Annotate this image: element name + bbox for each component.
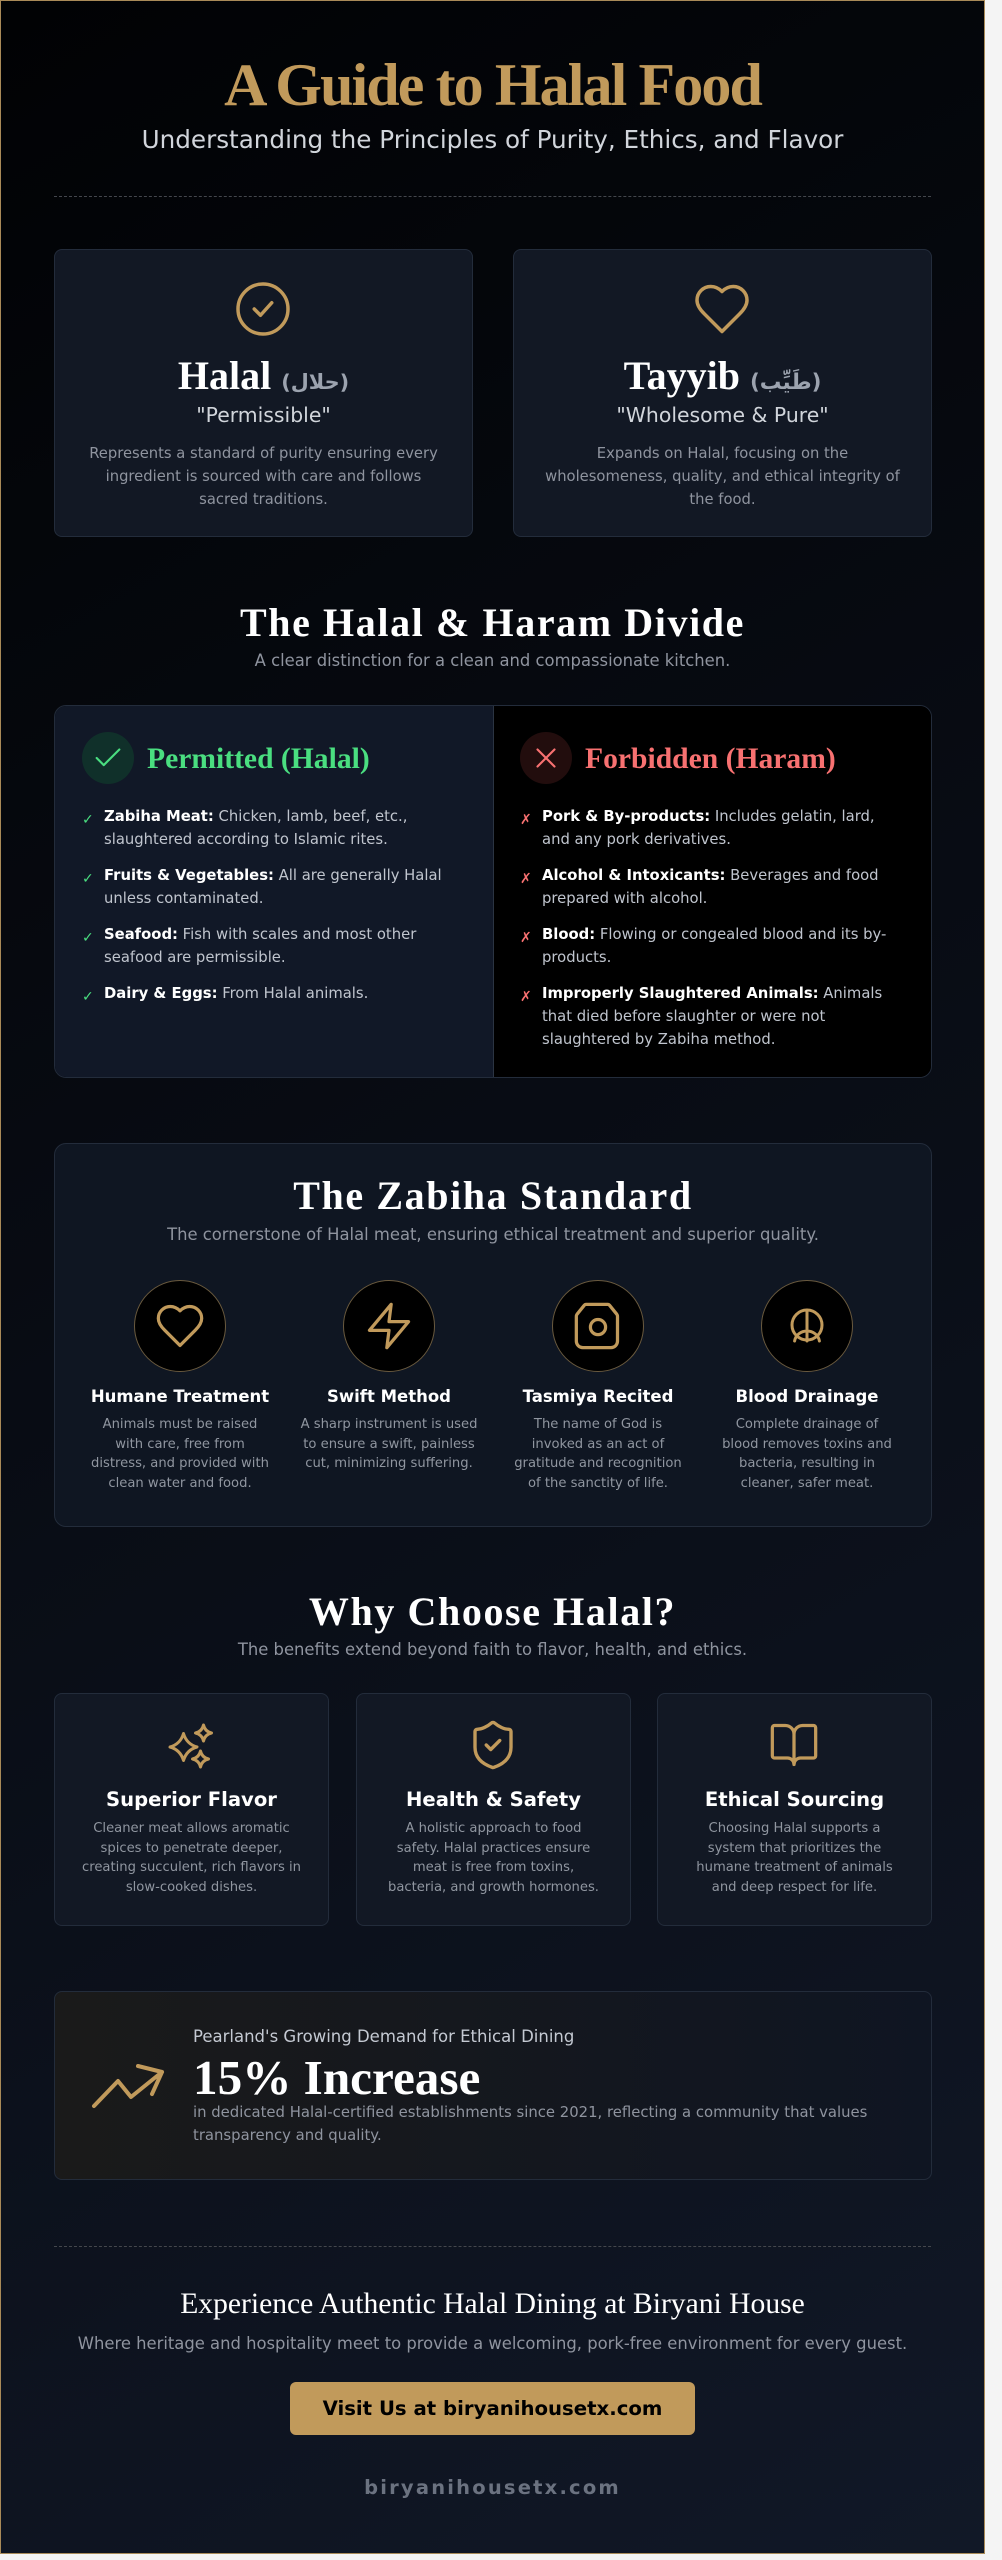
list: forbidden items: ✗	[520, 930, 532, 946]
panel: Ethical Sourcing	[657, 1693, 932, 1926]
panel: Superior Flavor	[54, 1693, 329, 1926]
translation: "Permissible"	[196, 403, 331, 427]
card title: Superior Flavor	[106, 1788, 277, 1811]
step description	[300, 1417, 477, 1471]
step title: Blood Drainage	[736, 1387, 878, 1406]
button: visit us	[290, 2382, 695, 2435]
subtitle: Understanding the Principles of Purity, Ethics, and Flavor	[142, 125, 843, 154]
heading: Tayyib: Tayyib (طَيِّب)	[624, 353, 821, 398]
icon: sparkles	[168, 1724, 213, 1768]
step description: Complete drainage of	[736, 1417, 878, 1432]
button: visit us: Visit Us at biryanihousetx.com	[323, 2397, 662, 2420]
list: forbidden items: Pork & By-products: Includes gelatin, lard,	[542, 808, 875, 825]
card description: Cleaner meat allows aromatic	[93, 1821, 290, 1836]
title: A Guide to Halal Food	[224, 52, 761, 118]
list: permitted items: Fruits & Vegetables: All are generally Halal	[104, 867, 442, 884]
list: permitted items: Seafood: Fish with scales and most other	[104, 926, 416, 943]
step description: cut, minimizing suffering.	[305, 1456, 473, 1471]
step description: with care, free from	[115, 1437, 245, 1452]
step description: bacteria, resulting in	[739, 1456, 875, 1471]
heading: Halal: Halal (حلال)	[178, 353, 349, 398]
card description: and deep respect for life.	[712, 1880, 877, 1895]
step description: to ensure a swift, painless	[303, 1437, 475, 1452]
heading: Halal and Haram divide: The Halal & Haram Divide	[240, 600, 745, 645]
step description: A sharp instrument is used	[301, 1417, 477, 1432]
description	[89, 445, 438, 508]
column: permitted	[55, 706, 494, 1077]
icon: chamfered frame with circle	[552, 1280, 644, 1372]
step description: clean water and food.	[108, 1476, 252, 1491]
list: forbidden items: and any pork derivatives.	[542, 831, 731, 848]
list: forbidden items: ✗	[520, 812, 532, 828]
step description: invoked as an act of	[532, 1437, 664, 1452]
list: permitted items: ✓	[82, 989, 94, 1005]
list: forbidden items: Blood: Flowing or congealed blood and its by-	[542, 926, 886, 943]
card description	[82, 1821, 301, 1895]
panel: Halal definition	[54, 249, 473, 537]
card description: Choosing Halal supports a	[709, 1821, 880, 1836]
stat description	[193, 2103, 867, 2144]
stat description: in dedicated Halal-certified establishments since 2021, reflecting a community that values	[193, 2103, 867, 2121]
icon: open book	[770, 1724, 818, 1766]
step description: cleaner, safer meat.	[741, 1476, 873, 1491]
list: permitted items: ✓	[82, 930, 94, 946]
icon: shield check	[473, 1720, 513, 1770]
list: forbidden items: that died before slaughter or were not	[542, 1008, 825, 1025]
list: permitted items: Zabiha Meat: Chicken, lamb, beef, etc.,	[104, 808, 407, 825]
call to action description: Where heritage and hospitality meet to provide a welcoming, pork-free environment for every guest.	[78, 2334, 907, 2353]
description: Represents a standard of purity ensuring every	[89, 445, 438, 462]
list: permitted items: ✓	[82, 871, 94, 887]
stat description: transparency and quality.	[193, 2126, 382, 2144]
list: permitted items: seafood are permissible.	[104, 949, 286, 966]
step description: blood removes toxins and	[722, 1437, 892, 1452]
icon: peace-like circle	[761, 1280, 853, 1372]
list: permitted items: ✓	[82, 812, 94, 828]
step description	[91, 1417, 269, 1491]
description: ingredient is sourced with care and follows	[106, 468, 421, 485]
heading: Zabiha standard: The Zabiha Standard	[293, 1173, 693, 1218]
card description	[388, 1821, 599, 1895]
step: Tasmiya Recited	[514, 1280, 682, 1491]
icon: heart	[134, 1280, 226, 1372]
icon: lightning bolt	[343, 1280, 435, 1372]
step description	[514, 1417, 682, 1491]
list: forbidden items: Improperly Slaughtered Animals: Animals	[542, 985, 882, 1002]
card description: creating succulent, rich flavors in	[82, 1860, 301, 1875]
step description: The name of God is	[534, 1417, 662, 1432]
card description: system that prioritizes the	[708, 1841, 881, 1856]
card description: meat is free from toxins,	[413, 1860, 574, 1875]
step description: Animals must be raised	[103, 1417, 257, 1432]
step description: gratitude and recognition	[514, 1456, 682, 1471]
list: forbidden items	[520, 808, 886, 1048]
section subtitle: A clear distinction for a clean and compassionate kitchen.	[255, 651, 730, 670]
step: Blood Drainage	[722, 1280, 892, 1491]
panel: statistic callout	[54, 1991, 932, 2180]
section subtitle: The cornerstone of Halal meat, ensuring ethical treatment and superior quality.	[167, 1225, 819, 1244]
panel: Halal vs Haram comparison	[54, 705, 932, 1078]
stat label: Pearland's Growing Demand for Ethical Dining	[193, 2027, 574, 2046]
heading: call to action: Experience Authentic Halal Dining at Biryani House	[180, 2288, 805, 2320]
description: wholesomeness, quality, and ethical integrity of	[545, 468, 900, 485]
list: forbidden items: slaughtered by Zabiha method.	[542, 1031, 775, 1048]
list: permitted items: unless contaminated.	[104, 890, 264, 907]
icon: trending up arrow	[92, 2064, 164, 2108]
step title: Swift Method	[327, 1387, 451, 1406]
description: the food.	[689, 491, 756, 508]
footer website: biryanihousetx.com	[364, 2476, 621, 2499]
card title: Health & Safety	[406, 1788, 581, 1811]
list: permitted items: Dairy & Eggs: From Halal animals.	[104, 985, 368, 1002]
heading: permitted: Permitted (Halal)	[147, 743, 370, 775]
icon: heart	[695, 284, 749, 334]
icon: green check badge	[82, 732, 134, 784]
card description: slow-cooked dishes.	[126, 1880, 257, 1895]
icon: check circle	[236, 282, 290, 336]
step description	[722, 1417, 892, 1491]
heading: forbidden: Forbidden (Haram)	[585, 743, 836, 775]
card title: Ethical Sourcing	[705, 1788, 884, 1811]
step: Swift Method	[300, 1280, 477, 1471]
description: sacred traditions.	[199, 491, 328, 508]
column: forbidden	[494, 706, 931, 1077]
heading: why choose halal: Why Choose Halal?	[309, 1589, 676, 1634]
card description: A holistic approach to food	[406, 1821, 581, 1836]
step description: distress, and provided with	[91, 1456, 269, 1471]
list: forbidden items: products.	[542, 949, 611, 966]
card description: safety. Halal practices ensure	[397, 1841, 590, 1856]
card description	[696, 1821, 893, 1895]
section subtitle: The benefits extend beyond faith to flavor, health, and ethics.	[238, 1640, 747, 1659]
panel: Tayyib definition	[513, 249, 932, 537]
list: permitted items: slaughtered according to Islamic rites.	[104, 831, 388, 848]
step: Humane Treatment	[91, 1280, 269, 1491]
card description: spices to penetrate deeper,	[101, 1841, 282, 1856]
stat number: 15% Increase	[193, 2050, 480, 2105]
panel: Health and Safety	[356, 1693, 631, 1926]
list: forbidden items: ✗	[520, 871, 532, 887]
list: permitted items	[82, 808, 442, 1005]
panel: Zabiha standard	[54, 1143, 932, 1527]
list: forbidden items: ✗	[520, 989, 532, 1005]
card description: humane treatment of animals	[696, 1860, 893, 1875]
step description: of the sanctity of life.	[528, 1476, 668, 1491]
icon: red x badge	[520, 732, 572, 784]
list: forbidden items: Alcohol & Intoxicants: Beverages and food	[542, 867, 879, 884]
step title: Humane Treatment	[91, 1387, 269, 1406]
translation: "Wholesome & Pure"	[616, 403, 829, 427]
description: Expands on Halal, focusing on the	[597, 445, 848, 462]
list: forbidden items: prepared with alcohol.	[542, 890, 707, 907]
description	[545, 445, 900, 508]
step title: Tasmiya Recited	[523, 1387, 673, 1406]
card description: bacteria, and growth hormones.	[388, 1880, 599, 1895]
